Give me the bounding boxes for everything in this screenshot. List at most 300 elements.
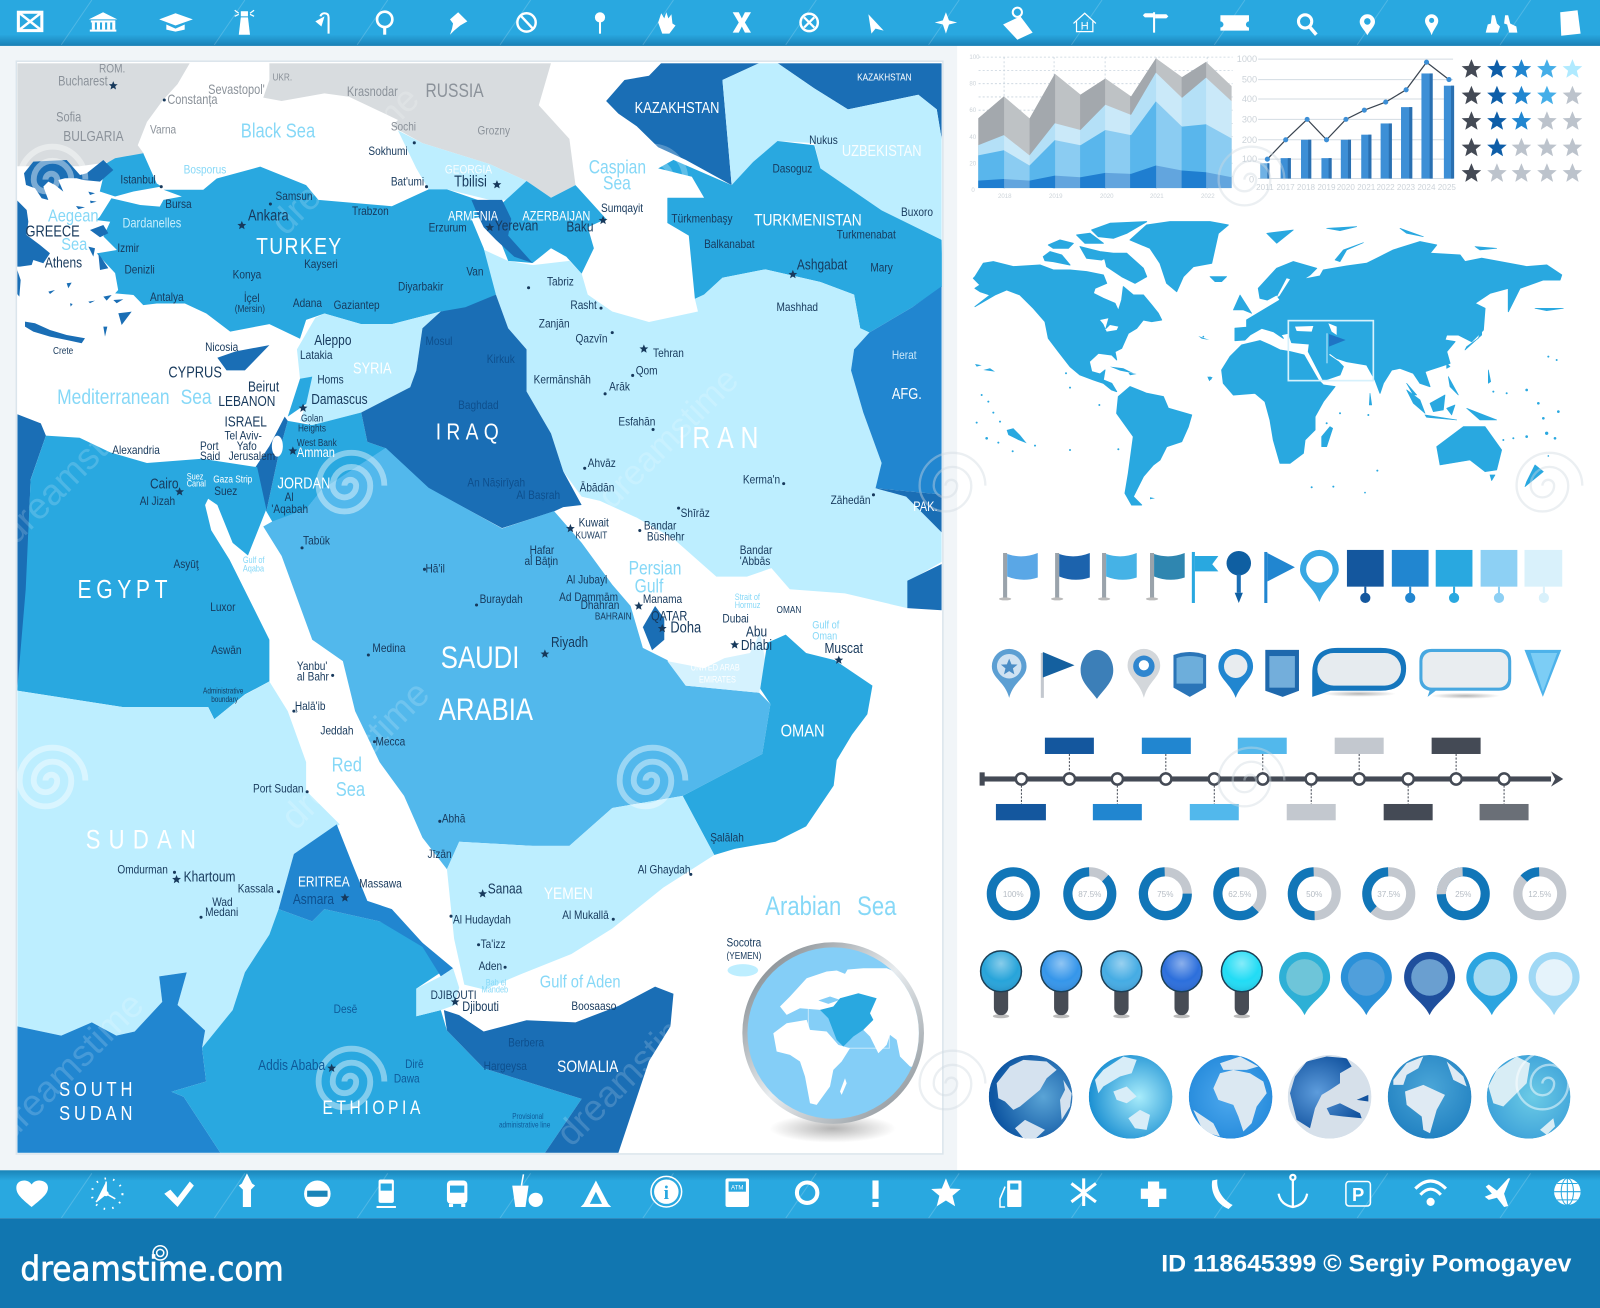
region: Somalia	[444, 987, 673, 1153]
map labels: seas and water bodies: Oman	[812, 631, 838, 643]
icon: ring pin	[377, 12, 392, 35]
region: Lebanon	[288, 377, 312, 417]
map labels: cities: Şalālah	[710, 832, 744, 845]
region: South Sudan	[17, 972, 220, 1153]
map labels: cities: Amman	[297, 445, 335, 460]
map labels: cities: Asyūţ	[173, 558, 199, 571]
round pin one	[981, 951, 1021, 1018]
map labels: cities: Kirkuk	[487, 353, 515, 366]
bottom icon bar	[0, 1170, 1600, 1218]
map labels: country names: JORDAN	[278, 475, 330, 493]
donut 62.5%	[1218, 872, 1262, 916]
region: Afghanistan	[851, 286, 942, 495]
map labels: seas and water bodies: Bosporus	[184, 164, 227, 177]
map labels: cities: Antalya	[150, 291, 184, 304]
donut 37.5%	[1367, 872, 1411, 916]
area chart	[969, 51, 1233, 200]
round pin two	[1041, 951, 1082, 1018]
bar and line chart: 2019	[1317, 183, 1336, 192]
bar and line chart: 2022	[1377, 183, 1395, 192]
map labels: seas and water bodies: Sea	[336, 777, 366, 800]
map labels: neighbouring land names: Grozny	[478, 125, 510, 138]
area chart: 80	[969, 81, 977, 88]
donut 25%: 25%	[1455, 890, 1471, 899]
map labels: cities: Ḩalā'ib	[295, 700, 325, 713]
icon: bus	[447, 1180, 467, 1207]
map labels: cities: Bursa	[165, 198, 192, 211]
footer band	[0, 1218, 1600, 1308]
icon: tent	[581, 1180, 611, 1207]
region: Turkmenistan	[658, 141, 943, 332]
icon: anchor	[1279, 1175, 1307, 1207]
drop pin navy	[1404, 952, 1455, 1015]
globe: Asia Pacific	[1089, 1055, 1172, 1139]
map labels: cities: Balkanabat	[704, 238, 755, 251]
map labels: cities: Athens	[45, 254, 82, 271]
map labels: cities: Buxoro	[901, 206, 933, 219]
top icon bar	[0, 0, 1600, 46]
map labels: country names: SUDAN	[86, 826, 204, 855]
flags row	[999, 550, 1562, 603]
drop pin teal	[1279, 952, 1330, 1015]
globe pin	[1218, 649, 1253, 698]
watermark wordmarks on map	[0, 78, 746, 1153]
map labels: neighbouring land names: Sevastopol'	[208, 82, 265, 97]
continent: North America	[973, 262, 1162, 392]
map labels: cities: Aleppo	[314, 332, 351, 348]
icon: info: i	[664, 1183, 670, 1204]
donut 50%: 50%	[1306, 890, 1322, 899]
region: Jordan	[266, 412, 386, 522]
map labels: cities: Alexandria	[112, 444, 161, 457]
map labels: country names: SOMALIA	[557, 1058, 619, 1077]
timeline	[980, 738, 1563, 820]
map labels: cities: Luxor	[210, 601, 236, 614]
drop pins	[1279, 952, 1580, 1015]
map labels: cities: Mashhad	[777, 301, 818, 314]
map labels: seas and water bodies: Sea	[603, 172, 631, 194]
map labels: seas and water bodies: Caspian	[589, 156, 646, 178]
map labels: cities: Homs	[317, 374, 344, 387]
colour swatch markers	[1347, 550, 1562, 603]
watermark spirals on right panel	[920, 147, 1582, 1109]
donut 50%	[1292, 872, 1336, 916]
map labels: cities: Dasoguz	[772, 162, 813, 176]
world map	[973, 222, 1563, 505]
globe: Africa	[1189, 1055, 1272, 1139]
map labels: cities: Türkmenbaşy	[671, 212, 733, 226]
panel: regional map	[0, 61, 943, 1154]
map labels: cities: Trabzon	[352, 205, 389, 218]
map labels: seas and water bodies: Sea	[181, 385, 212, 409]
icon: heart	[16, 1180, 48, 1207]
map labels: cities: Jīzān	[428, 848, 452, 861]
islands	[1210, 227, 1563, 487]
region: Iraq	[361, 295, 582, 528]
map labels: neighbouring land names: BULGARIA	[63, 128, 124, 144]
map labels: cities: KUWAIT	[576, 530, 608, 541]
map labels: country names: UNITED ARAB	[691, 663, 740, 672]
map labels: cities: Dirē	[405, 1058, 424, 1071]
bar and line chart: 1000	[1237, 54, 1257, 64]
region: Russia and Ukraine grey land	[263, 63, 576, 198]
mini globe inset	[742, 942, 930, 1143]
map labels: cities: boundary	[211, 695, 238, 704]
icon: ticket	[1220, 15, 1249, 31]
map labels: cities: Bat'umi	[391, 176, 424, 189]
region: UAE	[667, 633, 765, 693]
icon: no sign	[517, 13, 536, 32]
map labels: country names: EGYPT	[78, 575, 172, 603]
region: Sudan	[17, 682, 340, 1048]
watermark wordmarks on map: dreamstime	[273, 673, 437, 837]
map labels: neighbouring land names: ROM.	[99, 63, 125, 76]
icon: tower	[239, 1173, 255, 1207]
icon: exclamation	[872, 1180, 879, 1207]
bar and line chart: 2011	[1256, 183, 1274, 192]
map labels: cities: Yerevan	[495, 217, 538, 234]
map labels: cities: Ad Dammām	[559, 591, 618, 604]
rating stars	[1462, 59, 1582, 182]
map labels: cities: Ābādān	[580, 482, 614, 495]
watermark wordmarks on map: dreamstime	[591, 361, 746, 516]
icon: globe	[1554, 1178, 1581, 1205]
map labels: cities: West Bank	[297, 437, 337, 448]
icon: hand	[658, 12, 676, 34]
map labels: cities: Addis Ababa	[258, 1057, 326, 1074]
map labels: cities: Dhahran	[581, 599, 619, 612]
map labels: cities: Asmara	[293, 891, 335, 907]
shield marker	[1173, 652, 1206, 697]
map labels: cities: Istanbul	[120, 174, 156, 187]
map labels: cities: (Mersin)	[235, 303, 265, 314]
map labels: cities: Tehran	[653, 347, 684, 360]
map labels: country names: GEORGIA	[445, 164, 492, 177]
map labels: cities: Desē	[334, 1003, 357, 1016]
icon: clock	[92, 1178, 122, 1209]
map labels: cities: Bandar	[740, 544, 773, 557]
region: Syria	[297, 311, 441, 425]
map labels: cities: Golan	[301, 413, 323, 424]
map labels: cities	[26, 134, 933, 1130]
map labels: cities: Mary	[870, 261, 893, 275]
map labels: cities: Zanjān	[539, 318, 570, 331]
map labels: seas and water bodies: Aqaba	[243, 564, 264, 574]
region: Uzbekistan	[722, 63, 942, 240]
map labels: seas and water bodies: Sea	[61, 235, 88, 254]
region: Iran	[481, 248, 942, 608]
region: Libya	[17, 414, 46, 691]
map labels: cities: Kermānshāh	[534, 374, 591, 387]
map labels: cities: Djibouti	[462, 999, 499, 1014]
map labels: cities: administrative line	[499, 1121, 550, 1130]
map labels: cities: Kayseri	[304, 258, 338, 272]
map labels: neighbouring land names: Bucharest	[58, 74, 108, 89]
map labels: seas and water bodies: Strait of	[735, 592, 761, 602]
map labels: cities: GREECE	[26, 223, 80, 241]
map labels: cities: LEBANON	[218, 393, 275, 409]
area layer: mid blue	[978, 101, 1232, 188]
bar and line chart: 2021	[1357, 183, 1376, 192]
map labels: neighbouring land names: Sofia	[56, 109, 81, 125]
footer image credit: ID 118645399 © Sergiy Pomogayev	[1161, 1250, 1572, 1277]
map labels: cities: Ta'izz	[481, 938, 506, 951]
push pin	[1227, 551, 1251, 603]
map labels: cities: Kassala	[238, 883, 274, 896]
map labels: cities: Sanaa	[488, 881, 523, 897]
map labels: cities: QATAR	[651, 608, 687, 624]
map labels: country names: ETHIOPIA	[322, 1097, 424, 1118]
map labels: cities: Medina	[372, 642, 406, 655]
speech bubble light	[1419, 649, 1511, 699]
map labels: cities: Baghdad	[458, 399, 499, 412]
map labels: cities: Abu	[746, 623, 767, 640]
continent: Greenland	[1130, 222, 1228, 292]
map labels: cities: Rasht	[570, 299, 598, 312]
map labels: cities: Al Hudaydah	[453, 913, 511, 927]
map labels: cities: Mosul	[426, 335, 452, 348]
area chart: 2020	[1100, 193, 1114, 200]
donut 75%	[1143, 872, 1187, 916]
map labels: seas and water bodies: Aegean	[48, 206, 99, 226]
tag marker	[1265, 650, 1299, 697]
map labels: country names: IRAN	[679, 420, 765, 454]
watermark wordmarks on map: dreamstime	[262, 78, 427, 242]
map labels: country names: IRAQ	[436, 419, 504, 445]
area chart: 20	[969, 160, 977, 167]
globe: Americas	[989, 1055, 1072, 1139]
drop pin pale	[1529, 952, 1580, 1015]
flag one	[999, 553, 1038, 600]
icon: star	[931, 1178, 961, 1206]
area chart: 60	[969, 107, 977, 114]
map labels: cities: Nukus	[809, 134, 838, 147]
donut 87.5%	[1068, 872, 1112, 916]
map labels: cities: CYPRUS	[168, 364, 222, 382]
map labels: cities: Medani	[205, 906, 238, 919]
area chart: 2022	[1201, 193, 1215, 200]
map labels: cities: Arāk	[609, 381, 630, 394]
icon: plus	[1141, 1181, 1166, 1207]
map labels: cities: Dubai	[722, 612, 749, 626]
bar and line chart: 0	[1249, 175, 1254, 185]
map labels: cities: Muscat	[824, 640, 863, 656]
map labels: cities: Al Baṣrah	[516, 489, 560, 502]
icon: train	[377, 1179, 396, 1207]
map labels: cities: 'Aqabah	[271, 503, 308, 516]
drop pin sky	[1466, 952, 1517, 1015]
map labels: cities: Khartoum	[184, 868, 235, 885]
bar and line chart: 2017	[1277, 183, 1295, 192]
map labels: cities: Jeddah	[320, 725, 354, 738]
map labels: cities: Administrative	[203, 687, 243, 696]
map markers row	[992, 648, 1561, 699]
map labels: cities: Yanbu'	[297, 660, 327, 674]
icon: envelope	[18, 12, 42, 31]
icon: no entry	[304, 1180, 331, 1207]
map labels: cities: Aden	[479, 960, 502, 973]
icon: lighthouse	[235, 10, 254, 35]
map labels: cities: ISRAEL	[224, 413, 267, 430]
map labels: cities: Crete	[53, 345, 73, 356]
map labels: cities: Provisional	[512, 1113, 544, 1121]
continent: Africa	[1222, 341, 1335, 463]
map labels: cities: Samsun	[276, 190, 313, 203]
map labels: cities: Būshehr	[647, 531, 685, 544]
round pin five	[1221, 951, 1262, 1018]
map labels: cities: Yafo	[237, 440, 257, 453]
map labels: cities: OMAN	[777, 604, 801, 615]
area chart: 0	[971, 187, 975, 194]
map labels: country names: SYRIA	[353, 360, 392, 378]
area layer: grey	[978, 58, 1232, 188]
map labels: country names: TURKEY	[256, 233, 343, 259]
map labels: cities: Hargeysa	[484, 1060, 528, 1073]
map labels: cities: Latakia	[300, 349, 333, 362]
globe: South America	[1388, 1055, 1471, 1139]
donut 100%	[991, 872, 1035, 916]
map labels: cities: Zāhedān	[831, 494, 870, 507]
watermark wordmarks on map: dreamstime	[548, 989, 713, 1153]
area chart: 40	[969, 134, 977, 141]
map labels: cities: Tabūk	[303, 535, 330, 548]
region: Greece mainland and islands	[17, 160, 132, 343]
map labels: cities: BAHRAIN	[595, 611, 632, 621]
map labels: neighbouring land names: RUSSIA	[426, 79, 484, 101]
map labels: cities: Esfahān	[618, 416, 655, 429]
map labels: seas and water bodies: Dardanelles	[122, 215, 181, 231]
map labels: cities: Wad	[212, 896, 233, 909]
icon: check	[164, 1181, 194, 1207]
map labels: seas and water bodies: Gulf	[635, 575, 663, 597]
map labels: cities: Abhā	[442, 812, 466, 826]
map labels: cities: An Nāṣirīyah	[467, 477, 525, 490]
map labels: seas and water bodies: Black Sea	[241, 119, 316, 142]
icon: ring	[797, 1183, 817, 1203]
map labels: cities: Said	[200, 450, 220, 463]
map labels: country names	[59, 72, 938, 1125]
icon: small pin	[595, 12, 605, 34]
map labels: cities: al Bahr	[297, 671, 329, 684]
map labels: country names: SUDAN	[59, 1102, 136, 1125]
region: Cyprus	[217, 345, 269, 370]
region: Djibouti	[416, 968, 459, 1016]
region: Kazakhstan west	[606, 63, 759, 185]
region: Balkans grey land	[17, 63, 190, 166]
teardrop marker	[1081, 650, 1113, 699]
map labels: country names: PAK.	[913, 499, 938, 514]
map labels: seas and water bodies: Mandeb	[482, 985, 509, 995]
region: Kazakhstan east	[778, 63, 942, 139]
icon: hotel house: H	[1081, 21, 1089, 33]
map labels: cities: Riyadh	[551, 634, 588, 650]
icon: ring pin two	[1360, 14, 1375, 35]
icon: document	[1560, 10, 1581, 36]
map labels: cities: Aswān	[211, 644, 242, 657]
icon: X	[733, 12, 751, 33]
footer logo wordmark: dreamstime.com	[20, 1249, 284, 1288]
map labels: neighbouring land names: UKR.	[272, 72, 292, 83]
map labels: cities: Denizli	[124, 264, 155, 277]
icon: parking: P	[1352, 1184, 1364, 1205]
Arctic islands of Canada	[1043, 222, 1147, 283]
map labels: cities: Heights	[298, 423, 326, 434]
bar and line chart: 500	[1242, 75, 1257, 85]
bar and line chart: 100	[1242, 154, 1257, 164]
bar and line chart: 200	[1242, 135, 1257, 145]
map labels: cities: Kuwait	[579, 517, 610, 530]
target pin	[1128, 649, 1160, 698]
region: Israel	[254, 417, 288, 511]
map labels: seas and water bodies: Gulf of Aden	[540, 972, 621, 992]
donut 87.5%: 87.5%	[1078, 890, 1101, 899]
region: Pakistan	[876, 488, 942, 610]
region: Socotra island	[728, 964, 758, 976]
bar and line chart: 300	[1242, 114, 1257, 124]
map labels: cities: Baku	[566, 218, 594, 235]
flag four	[1146, 553, 1185, 600]
map labels: country names: SOUTH	[59, 1077, 136, 1100]
icon: magnifier	[1298, 15, 1316, 35]
inland seas	[1277, 278, 1337, 335]
round pin four	[1161, 951, 1202, 1018]
icon: parking	[1346, 1181, 1370, 1206]
map labels: cities: Turkmenabat	[837, 229, 897, 242]
map labels: seas and water bodies: Mediterranean	[57, 385, 170, 409]
map labels: cities: Sokhumi	[368, 145, 408, 158]
map labels: country names: TURKMENISTAN	[754, 211, 862, 230]
map labels: country names: EMIRATES	[699, 675, 736, 685]
icon: two hands	[1486, 15, 1517, 33]
percentage donuts	[991, 872, 1562, 916]
continent: South America	[1117, 387, 1192, 505]
map labels: cities: Beirut	[248, 379, 279, 395]
map labels: seas and water bodies: Sea	[857, 892, 897, 922]
map labels: cities: Sumqayit	[601, 202, 644, 215]
map labels: cities: DJIBOUTI	[431, 989, 477, 1002]
map labels: cities: Ankara	[248, 207, 289, 225]
bar and line chart: 400	[1242, 94, 1257, 104]
area chart: 2019	[1049, 193, 1063, 200]
map labels: cities: Tabriz	[547, 276, 574, 289]
pennant flag	[1192, 552, 1218, 603]
left panel background	[0, 45, 957, 1170]
icon: tools	[1071, 1178, 1096, 1206]
map labels: cities: Shīrāz	[681, 507, 710, 520]
map labels: cities: Mecca	[376, 736, 406, 749]
icon: phone	[1212, 1179, 1233, 1209]
map labels: cities: Port Sudan	[253, 783, 304, 796]
icon: paper plane	[868, 14, 884, 34]
globe: Pacific	[1487, 1055, 1570, 1139]
donut 25%	[1441, 872, 1485, 916]
map capital stars and city dots	[109, 81, 875, 1072]
map labels: country names: KAZAKHSTAN	[635, 100, 719, 118]
area chart: 2021	[1150, 193, 1164, 200]
region: Turkey	[97, 167, 496, 339]
map labels: cities: Adana	[293, 297, 323, 310]
Great Lakes	[1100, 318, 1118, 332]
icon: folded map	[1003, 8, 1033, 40]
globes row	[989, 1055, 1570, 1139]
map labels: cities: Qazvīn	[576, 333, 607, 346]
map labels: seas and water bodies	[48, 119, 897, 995]
icon: wifi	[1415, 1181, 1446, 1206]
bar and line chart: 2018	[1297, 183, 1316, 192]
map labels: neighbouring land names: Krasnodar	[347, 84, 398, 99]
flag three	[1098, 553, 1137, 600]
region: Saudi Arabia	[263, 448, 770, 869]
